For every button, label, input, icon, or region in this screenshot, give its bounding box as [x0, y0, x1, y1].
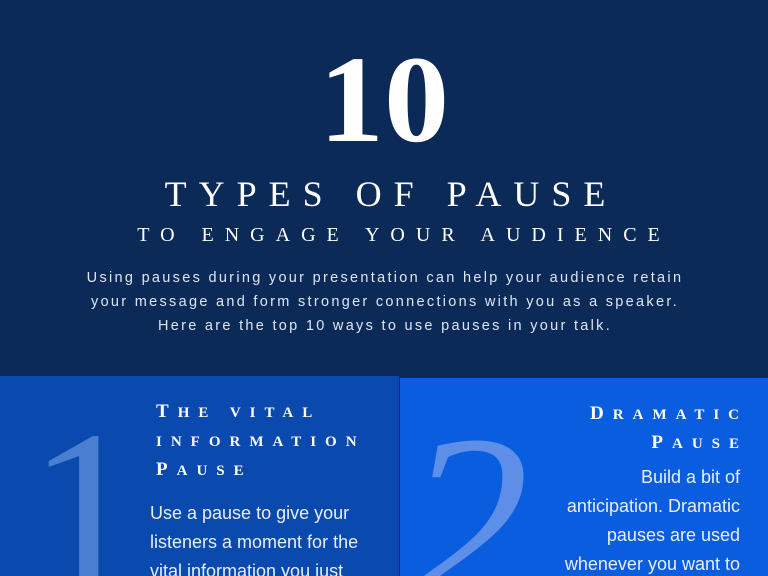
- title number: 10: [319, 31, 449, 168]
- heading: TYPES OF PAUSE: [165, 174, 617, 214]
- panel text: [150, 503, 358, 576]
- panel heading: [590, 403, 748, 453]
- intro text: [87, 270, 683, 334]
- panel text: pauses are used: [607, 525, 740, 545]
- intro text: Using pauses during your presentation can help your audience retain: [87, 270, 683, 286]
- panel text: anticipation. Dramatic: [567, 496, 740, 516]
- panel heading: PAUSE: [651, 432, 748, 453]
- panel text: listeners a moment for the: [150, 532, 358, 552]
- panel text: whenever you want to: [565, 554, 740, 574]
- panel text: Use a pause to give your: [150, 503, 349, 523]
- subheading: TO ENGAGE YOUR AUDIENCE: [137, 224, 671, 246]
- panel: dramatic pause: [400, 378, 768, 576]
- panel text: [564, 467, 740, 574]
- panel heading: THE VITAL INFORMATION PAUSE: [156, 401, 366, 480]
- intro text: Here are the top 10 ways to use pauses in your talk.: [158, 318, 612, 334]
- panel text: Build a bit of: [641, 467, 740, 487]
- panel: vital information pause: [0, 376, 399, 576]
- intro text: your message and form stronger connections with you as a speaker.: [91, 294, 679, 310]
- panel heading: DRAMATIC: [590, 403, 748, 424]
